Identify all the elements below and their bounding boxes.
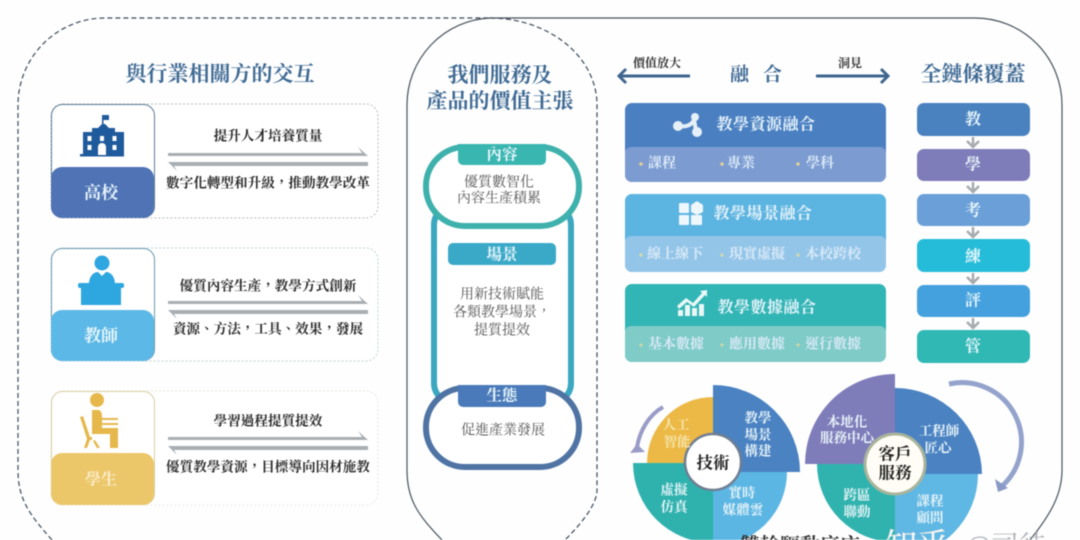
flow: full chain steps xyxy=(917,103,1030,363)
panel: teacher: 優質內容生產，教學方式創新 xyxy=(180,278,357,294)
panel: teacher: 資源、方法，工具、效果，發展 xyxy=(173,320,364,338)
panel: teaching resources integration: 學科 xyxy=(805,154,834,172)
chart: customer service pie: 跨區 xyxy=(844,486,870,502)
chart: customer service pie: 聯動 xyxy=(844,504,871,520)
arrows: two way exchange xyxy=(168,295,368,319)
heading: integration with arrows xyxy=(619,55,888,86)
panel: teaching data integration xyxy=(625,284,886,362)
panel: scenario xyxy=(434,205,571,403)
chart: technology pie: 仿真 xyxy=(660,498,690,516)
panel: scenario: 用新技術賦能 xyxy=(460,286,544,302)
chart: customer service pie: 本地化 xyxy=(827,414,868,430)
center label: customer service xyxy=(865,434,925,494)
outline: value proposition dashed right border xyxy=(490,18,597,540)
panel: ecosystem: 生態 xyxy=(486,386,519,404)
arrow: customer service rotation xyxy=(949,383,1022,492)
chart: customer service pie: 顧問 xyxy=(916,510,944,526)
arrows: two way exchange xyxy=(168,431,368,455)
chart: customer service pie: 工程師 xyxy=(919,424,960,438)
arrow: technology rotation xyxy=(630,407,663,453)
panel: student xyxy=(51,391,378,505)
icon: growth chart xyxy=(677,290,707,316)
panel: content: 內容生產積累 xyxy=(457,190,541,206)
panel: scenario: 提質提效 xyxy=(474,322,530,338)
panel: teaching data integration: 應用數據 xyxy=(729,336,785,352)
icon: seated student xyxy=(80,393,118,448)
chart: technology pie xyxy=(633,385,800,540)
center label: technology: 技術 xyxy=(696,452,730,472)
panel: teaching scenario integration: 現實虛擬 xyxy=(729,246,785,262)
flow: full chain steps: 教 xyxy=(965,110,981,128)
heading: stakeholder interaction: 與行業相關方的交互 xyxy=(126,62,314,86)
icon: network nodes xyxy=(673,113,702,137)
outline: value proposition and right section solid border xyxy=(407,18,1062,540)
icon: teacher at podium xyxy=(78,256,124,305)
arrows: chain downward xyxy=(967,137,979,328)
panel: scenario: 場景 xyxy=(486,246,518,264)
panel: teaching scenario integration: 本校跨校 xyxy=(805,246,862,262)
outline: stakeholder section dashed border xyxy=(18,18,490,540)
panel: teaching scenario integration: 教學場景融合 xyxy=(713,204,813,222)
icon: school building xyxy=(80,115,124,156)
panel: teacher xyxy=(51,248,378,361)
panel: teaching data integration: 基本數據 xyxy=(648,336,704,352)
panel: teaching scenario integration: 線上線下 xyxy=(647,246,704,262)
heading: integration with arrows: 融合 xyxy=(730,64,796,86)
heading: value proposition: 我們服務及 xyxy=(448,63,552,87)
panel: content: 內容 xyxy=(486,144,518,164)
center label: customer service: 服務 xyxy=(878,464,912,482)
panel: university: 高校 xyxy=(84,182,120,202)
panel: student: 優質教學資源，目標導向因材施教 xyxy=(166,458,370,474)
chart: technology pie: 虛擬 xyxy=(660,482,688,498)
panel: ecosystem: 促進產業發展 xyxy=(461,422,545,438)
heading: value proposition xyxy=(426,63,574,113)
icon: four tiles xyxy=(679,201,703,225)
panel: student: 學習過程提質提效 xyxy=(213,412,323,428)
flow: full chain steps: 練 xyxy=(965,246,981,266)
heading: integration with arrows: 價值放大 xyxy=(633,55,681,70)
panel: content: 優質數智化 xyxy=(464,174,534,190)
chart: technology pie: 智能 xyxy=(664,434,690,450)
heading: full chain coverage: 全鏈條覆蓋 xyxy=(920,62,1026,86)
panel: teaching resources integration xyxy=(625,103,886,182)
panel: teaching resources integration: 教學資源融合 xyxy=(716,114,816,134)
chart: customer service pie: 服務中心 xyxy=(820,430,876,446)
panel: teaching scenario integration xyxy=(625,194,886,272)
center label: technology xyxy=(685,434,741,490)
panel: teaching data integration: 運行數據 xyxy=(805,336,861,352)
flow: full chain steps: 學 xyxy=(964,156,981,174)
panel: student: 學生 xyxy=(84,470,117,488)
watermark xyxy=(885,527,1047,540)
panel: scenario: 各類教學場景， xyxy=(453,304,551,320)
flow: full chain steps: 評 xyxy=(965,292,981,310)
arrows: two way exchange xyxy=(168,147,368,171)
heading: integration with arrows: 洞見 xyxy=(838,55,862,70)
panel: teaching resources integration: 課程 xyxy=(648,156,676,172)
chart: technology pie: 實時 xyxy=(728,484,756,500)
panel: teacher: 教師 xyxy=(84,326,118,346)
chart: technology pie: 人工 xyxy=(662,418,690,432)
heading: value proposition: 產品的價值主張 xyxy=(426,89,574,113)
chart: customer service pie xyxy=(805,374,982,540)
panel: university: 數字化轉型和升級，推動教學改革 xyxy=(166,174,370,190)
chart: technology pie: 構建 xyxy=(744,442,772,458)
panel: teaching resources integration: 專業 xyxy=(727,154,757,172)
chart: technology pie: 教學 xyxy=(744,410,772,426)
chart: technology pie: 媒體雲 xyxy=(723,502,764,518)
panel: teaching data integration: 教學數據融合 xyxy=(717,298,817,316)
panel: ecosystem xyxy=(426,385,579,467)
chart: customer service pie: 匠心 xyxy=(924,440,954,456)
flow: full chain steps: 管 xyxy=(965,336,981,356)
panel: university xyxy=(51,104,378,218)
flow: full chain steps: 考 xyxy=(965,200,981,220)
panel: university: 提升人才培養質量 xyxy=(214,128,323,144)
chart: customer service pie: 課程 xyxy=(916,494,944,508)
center label: customer service: 客戶 xyxy=(878,444,912,464)
panel: content xyxy=(426,144,579,226)
chart: technology pie: 場景 xyxy=(744,428,772,442)
